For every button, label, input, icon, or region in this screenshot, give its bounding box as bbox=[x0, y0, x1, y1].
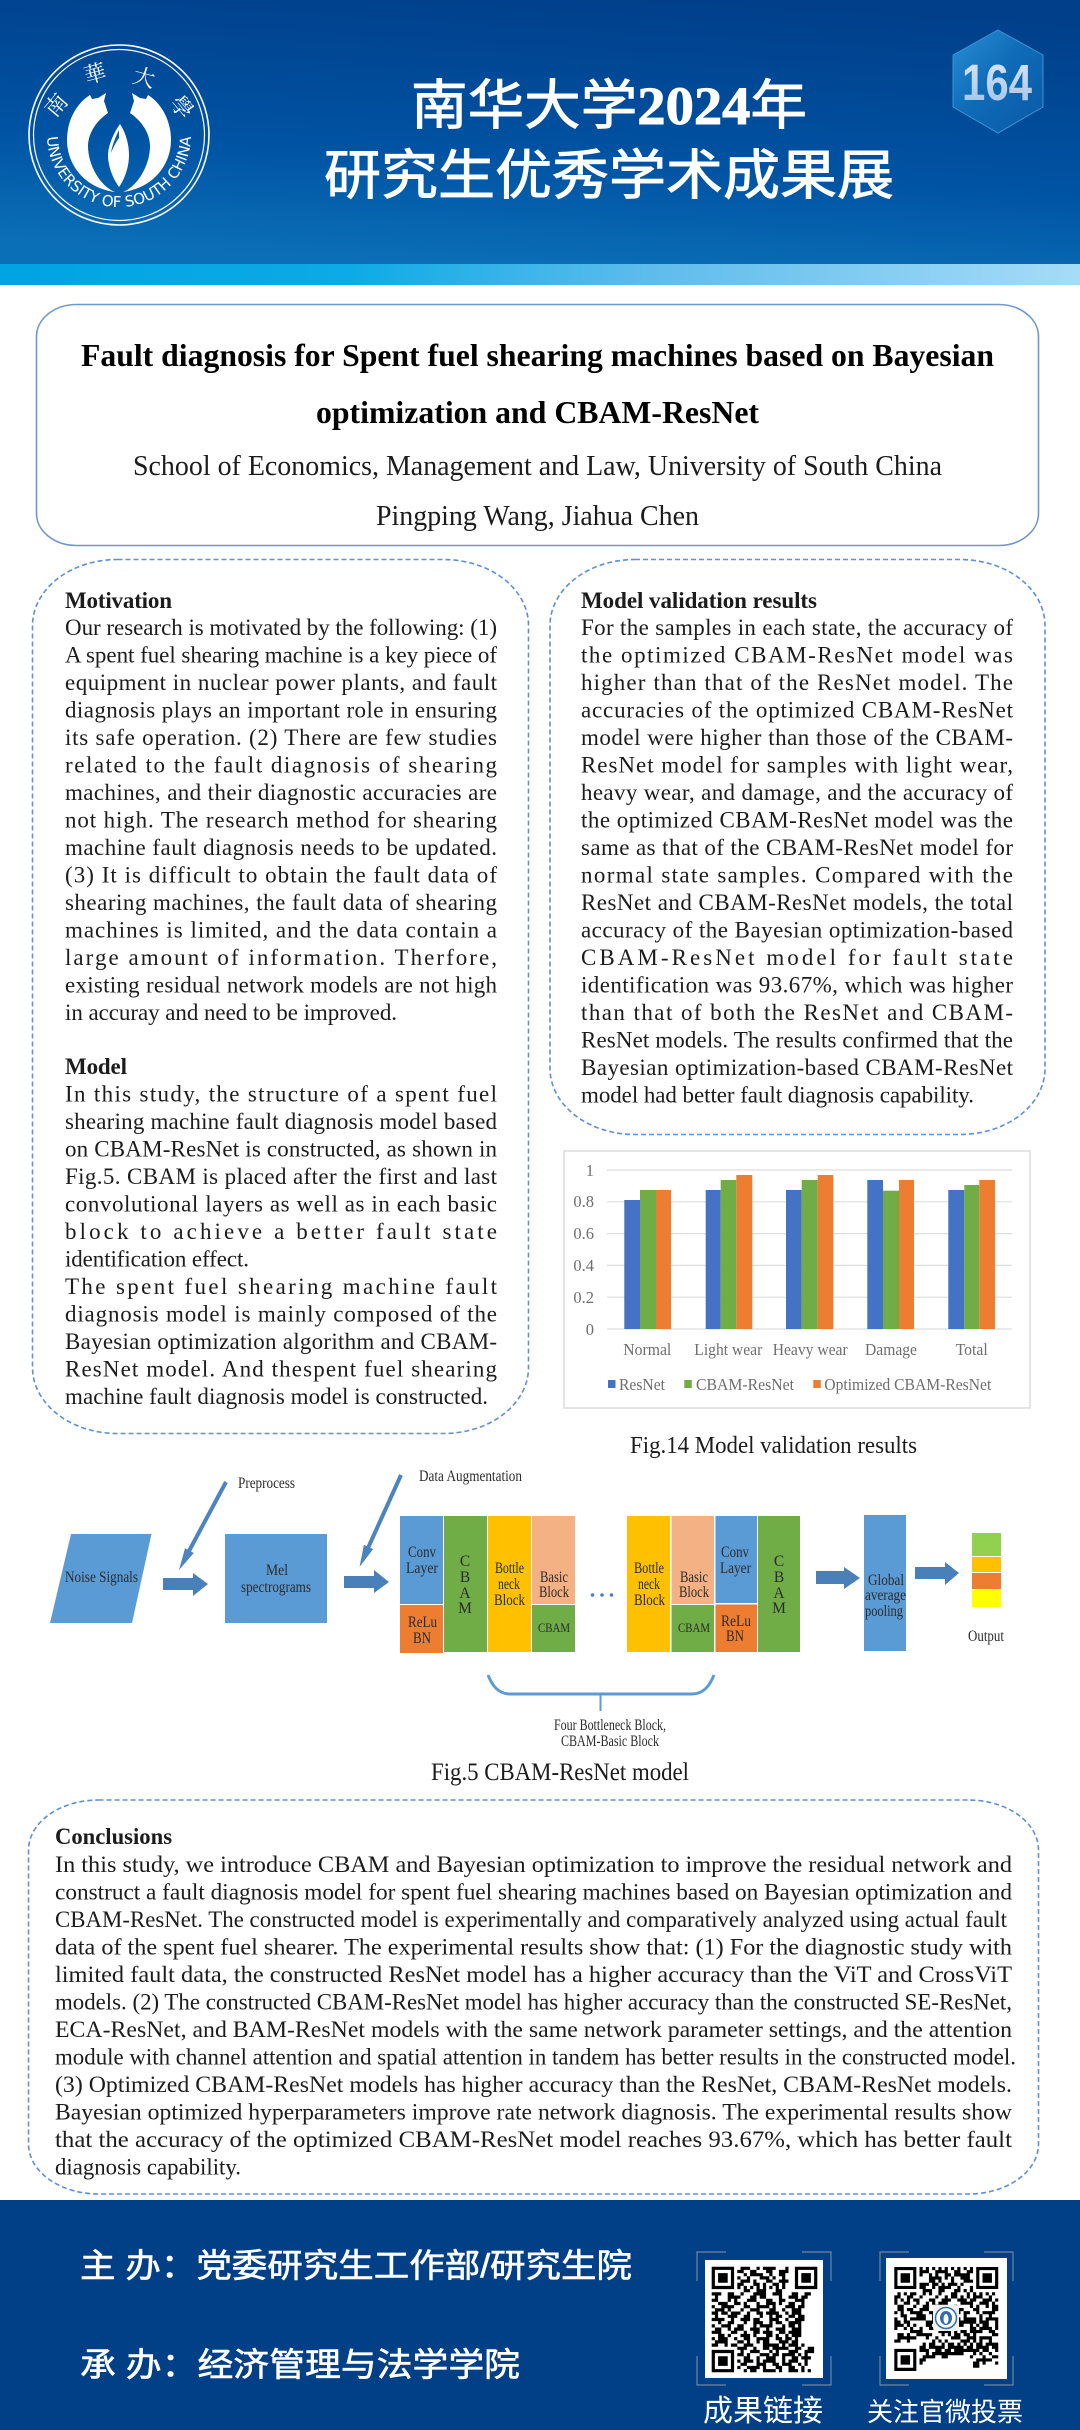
brace: four bottleneck blocks bbox=[488, 1675, 714, 1750]
network blocks: right group: Bottle bbox=[634, 1560, 664, 1577]
text: affiliation: School of Economics, Management and Law, University of South China bbox=[133, 451, 943, 482]
icon: university logo: 華 bbox=[80, 55, 109, 91]
text: motivation body: in accuray and need to be improved. bbox=[65, 1000, 397, 1025]
text: model body: Fig.5. CBAM is placed after the first and last bbox=[65, 1164, 498, 1189]
text: validation body: the optimized CBAM-ResNet model was the bbox=[581, 808, 1013, 832]
text: conclusions body: construct a fault diagnosis model for spent fuel shearing machines based on Bayesian optimization and bbox=[55, 1880, 1012, 1904]
heading: paper title: optimization and CBAM-ResNet bbox=[316, 394, 759, 430]
network blocks: right group: Block bbox=[679, 1584, 709, 1601]
text: authors: Pingping Wang, Jiahua Chen bbox=[376, 501, 699, 532]
text: motivation body: existing residual network models are not high bbox=[65, 972, 498, 998]
output stack: Output bbox=[968, 1628, 1005, 1645]
text: motivation body: A spent fuel shearing machine is a key piece of bbox=[65, 642, 497, 668]
text: validation body: higher than that of the ResNet model. The bbox=[581, 670, 1013, 695]
network blocks: left group: A bbox=[459, 1585, 471, 1602]
text: validation body: CBAM-ResNet model for fault state bbox=[581, 945, 1013, 970]
text: motivation body: diagnosis plays an important role in ensuring bbox=[65, 698, 498, 722]
text: validation body: ResNet models. The results confirmed that the bbox=[581, 1028, 1013, 1052]
network blocks: left group: M bbox=[458, 1600, 472, 1617]
text: validation body: heavy wear, and damage, and the accuracy of bbox=[581, 780, 1013, 805]
y axis labels: 0 bbox=[586, 1320, 594, 1339]
text: conclusions body: In this study, we introduce CBAM and Bayesian optimization to improve the residual network and bbox=[55, 1852, 1013, 1877]
arrow: data augmentation bbox=[360, 1468, 522, 1567]
bars: CBAM-ResNet bbox=[640, 1180, 979, 1329]
text: validation body: model had better fault diagnosis capability. bbox=[581, 1082, 974, 1108]
text: motivation body: Our research is motivated by the following: (1) bbox=[65, 615, 497, 640]
box: global average pooling: Global bbox=[868, 1572, 904, 1589]
footer band bbox=[0, 2200, 1080, 2430]
label: achievement link: 成果链接 bbox=[703, 2395, 823, 2428]
panel: paper title bbox=[36, 304, 1038, 546]
panel: model validation results bbox=[550, 560, 1045, 1134]
network blocks: right group: CBAM bbox=[678, 1620, 710, 1635]
text: motivation body: large amount of information. Therfore, bbox=[65, 945, 497, 970]
category labels bbox=[623, 1340, 988, 1359]
legend: CBAM-ResNet bbox=[696, 1375, 794, 1394]
network blocks: right group: ReLu bbox=[721, 1613, 751, 1630]
text: validation body: same as that of the CBAM-ResNet model for bbox=[581, 835, 1013, 860]
text: conclusions body: models. (2) The constructed CBAM-ResNet model has higher accuracy than the constructed SE-ResNet, bbox=[55, 1990, 1012, 2014]
text: conclusions body bbox=[55, 1852, 1016, 2180]
text: validation body: accuracies of the optimized CBAM-ResNet bbox=[581, 698, 1014, 722]
brace: four bottleneck blocks: Four Bottleneck Block, bbox=[554, 1717, 666, 1734]
heading: paper title bbox=[81, 337, 994, 430]
text: validation body: normal state samples. Compared with the bbox=[581, 862, 1013, 888]
heading: model validation results: Model validation results bbox=[581, 588, 817, 613]
text: validation body: ResNet and CBAM-ResNet models, the total bbox=[581, 890, 1013, 915]
arrow: block 2 bbox=[344, 1570, 389, 1593]
text: validation body: ResNet model for samples with light wear, bbox=[581, 752, 1013, 778]
category labels: Normal bbox=[623, 1340, 672, 1359]
y axis labels: 0.2 bbox=[573, 1288, 594, 1307]
network blocks: right group: Basic bbox=[680, 1569, 708, 1586]
icon: number badge 164: 164 bbox=[962, 54, 1033, 111]
text: conclusions body: module with channel attention and spatial attention in tandem has better results in the constructed model. bbox=[55, 2044, 1016, 2070]
panel: conclusions bbox=[28, 1800, 1038, 2194]
text: conclusions body: that the accuracy of the optimized CBAM-ResNet model reaches 93.67%, which has better fault bbox=[55, 2127, 1013, 2152]
network blocks: left group: B bbox=[460, 1569, 470, 1586]
ellipsis dots bbox=[591, 1593, 613, 1597]
text: model body: In this study, the structure of a spent fuel bbox=[65, 1082, 497, 1106]
y axis labels: 0.4 bbox=[573, 1256, 594, 1275]
arrow: preprocess bbox=[179, 1475, 295, 1570]
text: motivation body bbox=[65, 615, 498, 1025]
network blocks: right group: BN bbox=[726, 1628, 744, 1645]
y axis labels: 1 bbox=[586, 1161, 594, 1180]
network blocks: left group: C bbox=[460, 1553, 470, 1570]
main title in Chinese bbox=[324, 76, 894, 206]
main title in Chinese: 南华大学2024年 bbox=[411, 76, 807, 136]
text: motivation body: shearing machines, the fault data of shearing bbox=[65, 890, 498, 915]
text: model body: convolutional layers as well as in each basic bbox=[65, 1192, 497, 1216]
y axis labels bbox=[573, 1161, 594, 1339]
network blocks: left group: Bottle bbox=[495, 1560, 524, 1577]
category labels: Damage bbox=[865, 1340, 917, 1359]
box: mel spectrograms: Mel bbox=[266, 1562, 288, 1579]
text: validation body: accuracy of the Bayesian optimization-based bbox=[581, 918, 1014, 942]
text: motivation body: machines is limited, and the data contain a bbox=[65, 918, 497, 942]
heading: model: Model bbox=[65, 1054, 127, 1079]
text: validation body: Bayesian optimization-based CBAM-ResNet bbox=[581, 1055, 1014, 1080]
text: model body: ResNet model. And thespent fuel shearing bbox=[65, 1356, 498, 1382]
legend: Optimized CBAM-ResNet bbox=[824, 1375, 992, 1394]
network blocks: left group: CBAM bbox=[538, 1620, 570, 1635]
text: conclusions body: (3) Optimized CBAM-ResNet models has higher accuracy than the ResNet, CBAM-ResNet models. bbox=[55, 2072, 1012, 2097]
legend: ResNet bbox=[619, 1375, 665, 1394]
text: model body: machine fault diagnosis model is constructed. bbox=[65, 1384, 488, 1409]
text: validation body: model were higher than those of the CBAM- bbox=[581, 725, 1013, 750]
text: model body: identification effect. bbox=[65, 1246, 249, 1272]
text: model body: Bayesian optimization algorithm and CBAM- bbox=[65, 1329, 497, 1354]
box: mel spectrograms bbox=[225, 1534, 327, 1623]
bars: ResNet bbox=[624, 1180, 964, 1329]
box: mel spectrograms: spectrograms bbox=[241, 1579, 311, 1596]
diagram: CBAM-ResNet model bbox=[50, 1468, 1005, 1750]
category labels: Total bbox=[956, 1340, 988, 1359]
text: validation body: identification was 93.67%, which was higher bbox=[581, 972, 1013, 998]
box: global average pooling: pooling bbox=[865, 1603, 903, 1620]
text: motivation body: machines, and their diagnostic accuracies are bbox=[65, 780, 497, 805]
heading: paper title: Fault diagnosis for Spent fuel shearing machines based on Bayesian bbox=[81, 337, 994, 373]
text: organizer: 主 办：党委研究生工作部/研究生院 bbox=[80, 2247, 632, 2284]
text: model body: block to achieve a better fault state bbox=[65, 1219, 497, 1244]
arrow: data augmentation: Data Augmentation bbox=[419, 1468, 522, 1485]
text: co-organizer: 承 办：经济管理与法学学院 bbox=[80, 2346, 520, 2383]
text: motivation body: machine fault diagnosis needs to be updated. bbox=[65, 835, 497, 860]
heading: conclusions: Conclusions bbox=[55, 1824, 172, 1849]
caption: Fig.14: Fig.14 Model validation results bbox=[630, 1433, 917, 1459]
text: model body: on CBAM-ResNet is constructed, as shown in bbox=[65, 1136, 498, 1162]
main title in Chinese: 研究生优秀学术成果展 bbox=[324, 146, 894, 206]
text: conclusions body: Bayesian optimized hyperparameters improve rate network diagnosis. The experimental results show bbox=[55, 2100, 1012, 2124]
text: motivation body: equipment in nuclear power plants, and fault bbox=[65, 670, 498, 695]
header light band bbox=[0, 264, 1080, 285]
network blocks: right group: M bbox=[772, 1600, 786, 1617]
network blocks: left group: neck bbox=[498, 1576, 520, 1593]
arrow: preprocess: Preprocess bbox=[238, 1475, 295, 1492]
text: model body: shearing machine fault diagnosis model based bbox=[65, 1109, 498, 1134]
box: global average pooling: average bbox=[865, 1587, 906, 1604]
text: conclusions body: data of the spent fuel shearer. The experimental results show that: (1) For the diagnostic study with bbox=[55, 1934, 1013, 1960]
network blocks: right group: A bbox=[773, 1585, 785, 1602]
text: motivation body: (3) It is difficult to obtain the fault data of bbox=[65, 862, 497, 888]
text: model body: diagnosis model is mainly composed of the bbox=[65, 1302, 497, 1326]
legend bbox=[608, 1375, 992, 1394]
network blocks: right group: neck bbox=[638, 1576, 660, 1593]
network blocks: left group: ReLu bbox=[408, 1614, 437, 1631]
bar chart: model validation results bbox=[564, 1151, 1030, 1408]
network blocks: left group: Layer bbox=[406, 1560, 439, 1577]
category labels: Light wear bbox=[694, 1340, 763, 1359]
network blocks: left group: Block bbox=[494, 1592, 525, 1609]
text: motivation body: not high. The research method for shearing bbox=[65, 808, 498, 832]
network blocks: right group: C bbox=[774, 1553, 784, 1570]
output stack bbox=[968, 1533, 1005, 1645]
box: global average pooling bbox=[864, 1515, 906, 1651]
network blocks: left group bbox=[400, 1516, 575, 1653]
text: motivation body: related to the fault diagnosis of shearing bbox=[65, 752, 498, 778]
QR code: achievement link bbox=[697, 2252, 831, 2385]
network blocks: right group: Conv bbox=[721, 1544, 749, 1561]
heading: motivation: Motivation bbox=[65, 588, 172, 613]
icon: university logo: UNIVERSITY OF SOUTH CHINA bbox=[47, 136, 192, 207]
category labels: Heavy wear bbox=[773, 1340, 848, 1359]
panel: motivation and model bbox=[32, 560, 528, 1434]
text: model body: The spent fuel shearing machine fault bbox=[65, 1274, 498, 1299]
arrow: block 4 bbox=[915, 1562, 959, 1585]
text: motivation body: its safe operation. (2) There are few studies bbox=[65, 725, 497, 750]
network blocks: right group: Block bbox=[634, 1592, 665, 1609]
icon: number badge 164 bbox=[953, 30, 1043, 133]
network blocks: left group: BN bbox=[413, 1630, 431, 1647]
text: conclusions body: CBAM-ResNet. The constructed model is experimentally and comparatively analyzed using actual fault bbox=[55, 1907, 1008, 1932]
arrow: block 1 bbox=[163, 1573, 208, 1596]
icon: university logo: 大 bbox=[130, 59, 159, 95]
network blocks: left group: Conv bbox=[408, 1544, 436, 1561]
arrow: block 3 bbox=[816, 1567, 860, 1589]
icon: university logo: 學 bbox=[164, 88, 201, 125]
input: noise signals bbox=[50, 1534, 152, 1623]
network blocks: right group: Layer bbox=[720, 1560, 752, 1577]
text: validation body bbox=[581, 615, 1014, 1108]
network blocks: left group: Basic bbox=[540, 1569, 568, 1586]
input: noise signals: Noise Signals bbox=[65, 1569, 138, 1586]
y axis labels: 0.8 bbox=[573, 1192, 594, 1211]
text: validation body: than that of both the ResNet and CBAM- bbox=[581, 1000, 1013, 1025]
icon: university logo bbox=[28, 44, 210, 226]
caption: Fig.5: Fig.5 CBAM-ResNet model bbox=[431, 1759, 689, 1786]
text: validation body: For the samples in each state, the accuracy of bbox=[581, 615, 1013, 640]
y axis labels: 0.6 bbox=[573, 1224, 594, 1243]
network blocks: right group: B bbox=[774, 1569, 784, 1586]
text: validation body: the optimized CBAM-ResNet model was bbox=[581, 642, 1013, 668]
network blocks: left group: Block bbox=[539, 1584, 569, 1601]
bars: Optimized CBAM-ResNet bbox=[656, 1175, 995, 1329]
brace: four bottleneck blocks: CBAM-Basic Block bbox=[561, 1733, 659, 1750]
text: conclusions body: limited fault data, the constructed ResNet model has a higher accuracy than the ViT and CrossViT bbox=[55, 1962, 1012, 1987]
QR code: official account vote bbox=[880, 2252, 1013, 2385]
text: model body bbox=[65, 1082, 498, 1409]
header banner bbox=[0, 0, 1080, 285]
text: conclusions body: ECA-ResNet, and BAM-ResNet models with the same network parameter settings, and the attention bbox=[55, 2017, 1013, 2042]
text: conclusions body: diagnosis capability. bbox=[55, 2154, 241, 2180]
label: official account vote: 关注官微投票 bbox=[867, 2397, 1023, 2427]
network blocks: right group bbox=[627, 1516, 800, 1652]
icon: university logo: 南 bbox=[37, 86, 74, 123]
